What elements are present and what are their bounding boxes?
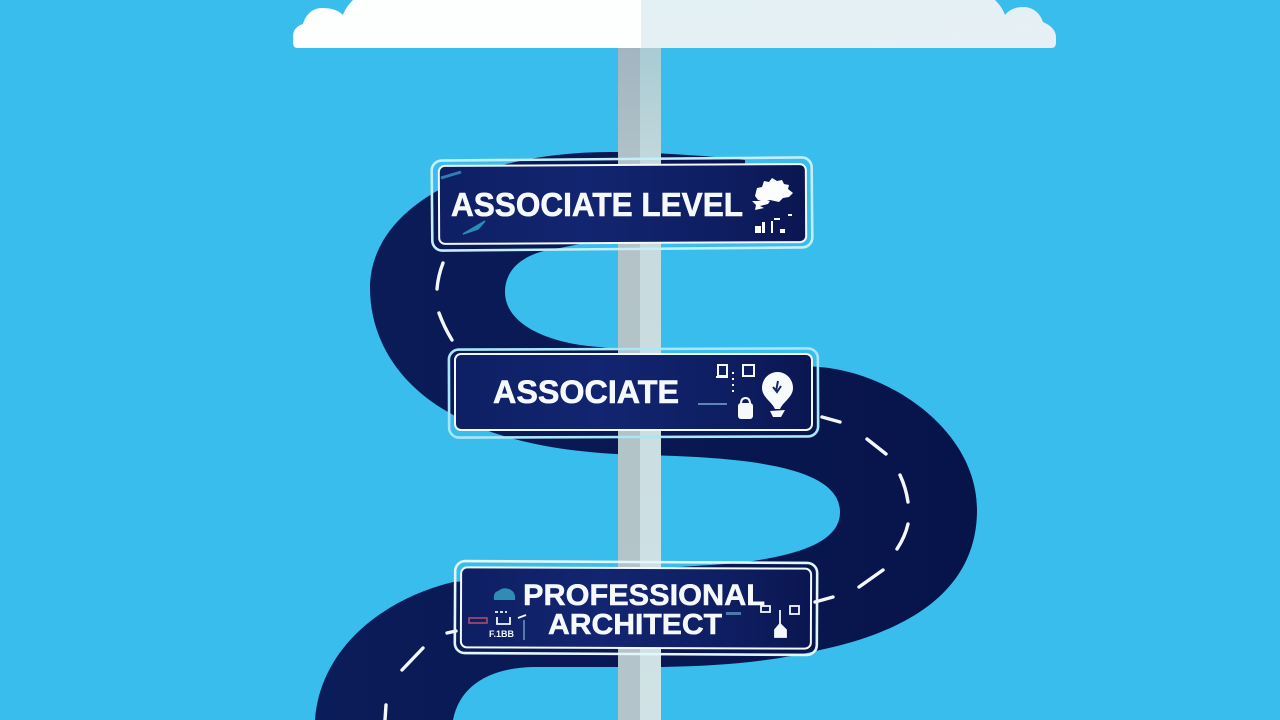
sign: associate <box>449 348 818 438</box>
icon: cloud tree <box>752 178 793 233</box>
sign: professional architect <box>455 561 817 655</box>
streaks <box>463 221 485 234</box>
signpost pole <box>618 48 661 720</box>
small blue tag <box>726 612 741 615</box>
label: ARCHITECT <box>548 609 722 641</box>
icons: left diagram: F.1BB <box>489 629 514 639</box>
label: ASSOCIATE LEVEL <box>451 186 743 223</box>
label <box>523 579 765 641</box>
icons: left diagram <box>469 612 526 640</box>
icon: location pin balloon <box>762 372 793 417</box>
icon: blue cloud <box>494 588 515 600</box>
small caption line <box>698 403 727 405</box>
icon: network nodes <box>716 365 754 393</box>
road dashes <box>385 263 908 720</box>
label: PROFESSIONAL <box>523 579 765 612</box>
sign: associate level <box>432 157 812 251</box>
label: ASSOCIATE <box>493 374 679 410</box>
icon: padlock <box>738 398 753 419</box>
cloud <box>293 0 1056 48</box>
icons: right diagram <box>761 606 799 637</box>
winding road <box>315 152 977 720</box>
